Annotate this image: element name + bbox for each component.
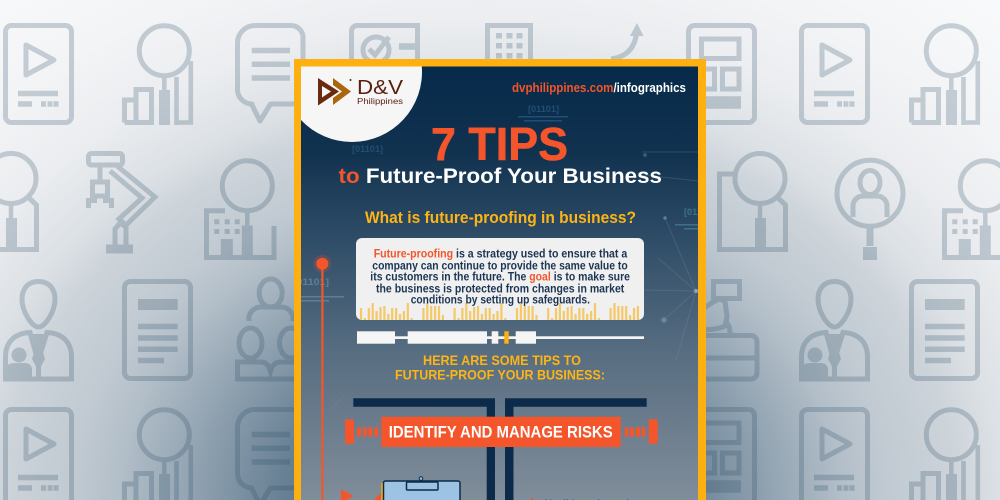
logo white circle bbox=[301, 66, 422, 142]
icon: magnifier with building bbox=[206, 161, 274, 259]
panel: definition box bbox=[356, 238, 644, 320]
icon: layout document bbox=[688, 26, 754, 122]
decorative binary tags and network bbox=[301, 106, 698, 397]
timeline line and node bbox=[313, 255, 331, 500]
banner right bracket bbox=[625, 419, 658, 444]
binary tag left: [01101] bbox=[293, 277, 329, 288]
icon: business person bbox=[802, 282, 868, 381]
red bullet bbox=[531, 498, 533, 500]
logo arrow mark bbox=[318, 78, 351, 106]
icon: business person bbox=[6, 282, 72, 381]
subtitle: to Future-Proof Your Business bbox=[338, 164, 662, 188]
icon: play document bbox=[802, 26, 868, 122]
icon: checklist document bbox=[352, 26, 420, 113]
logo wordmark: Philippines bbox=[357, 96, 403, 106]
logo badge bbox=[301, 66, 422, 142]
icon: robot arm bbox=[88, 154, 155, 249]
icon: magnifier with bar chart bbox=[912, 26, 978, 125]
panel: infographic poster bbox=[293, 59, 715, 500]
title: 7 tips: 7 TIPS bbox=[431, 118, 568, 170]
icon: magnifier with document bbox=[0, 154, 36, 252]
icon: play document bbox=[6, 410, 72, 500]
definition text bbox=[370, 249, 630, 307]
icon: person in magnifier bbox=[837, 160, 903, 260]
binary tag top: [01101] bbox=[528, 104, 559, 115]
icon: hand on box bbox=[689, 282, 757, 379]
section question heading: What is future-proofing in business? bbox=[365, 209, 636, 227]
icon: speech bubble bbox=[238, 26, 303, 121]
definition text: company can continue to provide the same value to bbox=[372, 260, 628, 272]
tips heading bbox=[395, 352, 605, 382]
poster dark panel bbox=[301, 66, 698, 500]
icon: group of people bbox=[238, 279, 306, 379]
binary tag left bbox=[301, 278, 344, 302]
binary tag right bbox=[675, 208, 698, 230]
logo wordmark bbox=[350, 77, 404, 106]
icon: magnifier with building bbox=[944, 161, 1000, 259]
icon: magnifier with document bbox=[720, 154, 786, 252]
icon: magnifier with bar chart bbox=[912, 410, 978, 500]
icon: text document bbox=[912, 282, 978, 378]
barcode divider bbox=[357, 331, 644, 344]
tips heading: HERE ARE SOME TIPS TO bbox=[423, 352, 581, 368]
icon: magnifier with bar chart bbox=[124, 26, 191, 125]
logo wordmark: D&V bbox=[357, 77, 404, 99]
dark connector frame bbox=[353, 398, 647, 500]
binary tag top bbox=[518, 104, 568, 122]
icon: text document bbox=[124, 282, 190, 378]
banner left bracket bbox=[345, 419, 378, 444]
icon: clipboard bbox=[374, 477, 460, 500]
icon: play document bbox=[6, 26, 72, 122]
icon: layout document bbox=[688, 410, 754, 500]
poster yellow frame bbox=[294, 59, 706, 500]
definition text: Future-proofing is a strategy used to ensure that a bbox=[374, 249, 628, 261]
arrow marker bbox=[341, 489, 354, 500]
icon: speech bubble bbox=[238, 410, 303, 500]
website url: dvphilippines.com/infographics bbox=[512, 81, 686, 95]
network lines bbox=[330, 152, 698, 410]
decorative audio bars bbox=[361, 303, 638, 320]
binary tag right: [01101] bbox=[684, 207, 715, 218]
definition box background bbox=[356, 238, 644, 320]
icon: play document bbox=[802, 410, 868, 500]
definition text: the business is protected from changes in market bbox=[376, 283, 624, 295]
definition text: its customers in the future. The goal is to make sure bbox=[370, 272, 630, 284]
banner background bbox=[381, 417, 621, 447]
icon: curved arrow bbox=[611, 23, 644, 59]
definition text: conditions by setting up safeguards. bbox=[411, 295, 590, 307]
tips heading: FUTURE-PROOF YOUR BUSINESS: bbox=[395, 366, 605, 382]
icon: magnifier with bar chart bbox=[124, 410, 191, 500]
binary tag under logo: [01101] bbox=[352, 144, 383, 155]
icon: office building bbox=[488, 26, 530, 113]
banner label: IDENTIFY AND MANAGE RISKS bbox=[389, 423, 613, 441]
tip banner bbox=[345, 417, 658, 447]
